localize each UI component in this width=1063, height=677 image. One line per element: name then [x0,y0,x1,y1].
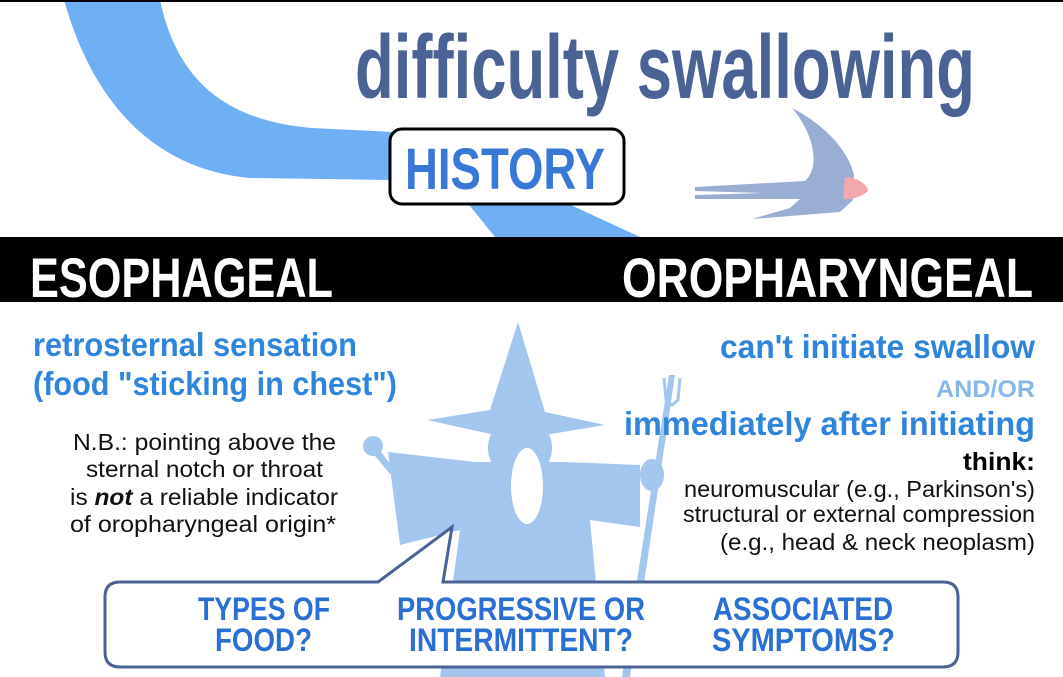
callout: history questions: TYPES OF [198,591,330,627]
right text: oropharyngeal symptoms: can't initiate swallow [720,328,1035,365]
left note [70,429,338,537]
icon: swallow bird [695,108,868,219]
right causes list: (e.g., head & neck neoplasm) [720,529,1035,555]
black header band: ESOPHAGEAL [30,246,333,309]
right text: oropharyngeal symptoms: AND/OR [936,376,1035,403]
right causes list: structural or external compression [683,501,1035,527]
black header band [0,237,1063,309]
history box: HISTORY [405,137,605,202]
right causes list: neuromuscular (e.g., Parkinson's) [684,476,1035,502]
callout: history questions [105,527,958,667]
left text: esophageal symptoms: (food "sticking in chest") [33,365,397,402]
left note: is not a reliable indicator [70,484,338,510]
left text: esophageal symptoms: retrosternal sensation [33,326,357,363]
callout: history questions: INTERMITTENT? [409,622,633,658]
left note: N.B.: pointing above the [73,429,336,455]
right text: oropharyngeal symptoms: think: [963,448,1035,476]
wizard figure [363,322,680,677]
callout: history questions: ASSOCIATED [713,591,893,627]
right text: oropharyngeal symptoms [624,328,1035,476]
callout: history questions: SYMPTOMS? [712,622,895,658]
left note: sternal notch or throat [86,456,324,482]
left note: of oropharyngeal origin* [70,511,336,537]
callout: history questions: PROGRESSIVE OR [397,591,645,627]
left text: esophageal symptoms [33,326,397,402]
right causes list [683,476,1035,555]
river shape [64,0,640,237]
callout: history questions: FOOD? [215,622,312,658]
right text: oropharyngeal symptoms: immediately after initiating [624,405,1035,442]
